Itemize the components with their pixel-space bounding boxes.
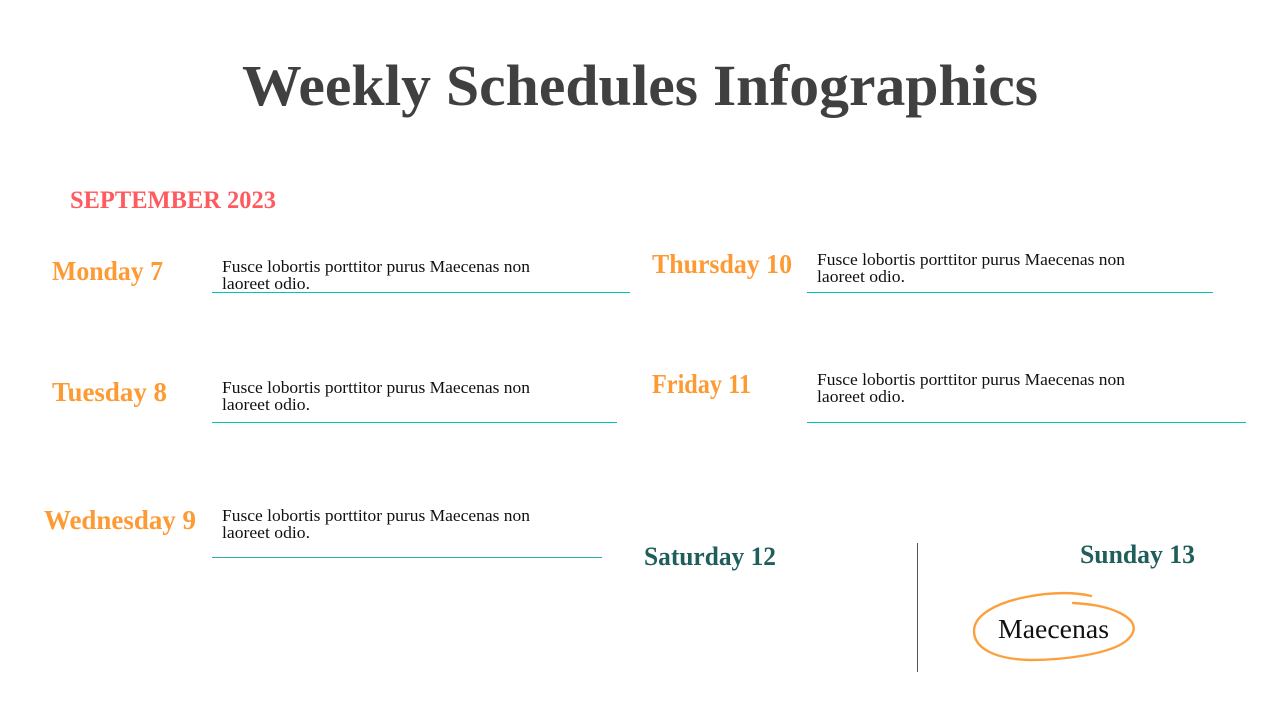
schedule row: Thursday 10: laoreet odio. — [817, 267, 905, 286]
icon: hand-drawn orange ellipse — [974, 593, 1134, 660]
schedule row: Monday 7: laoreet odio. — [222, 274, 310, 293]
schedule row: Monday 7: Monday 7 — [52, 256, 163, 286]
schedule row: Wednesday 9: Wednesday 9 — [44, 505, 196, 535]
schedule row: Tuesday 8: Tuesday 8 — [52, 377, 167, 407]
schedule row: Tuesday 8: Fusce lobortis porttitor purus Maecenas non — [222, 378, 531, 397]
weekend vertical divider — [916, 543, 918, 672]
title: Weekly Schedules Infographics — [242, 53, 1038, 118]
weekend heading: Saturday 12: Saturday 12 — [644, 542, 776, 571]
schedule row: Monday 7: Fusce lobortis porttitor purus Maecenas non — [222, 257, 531, 276]
schedule row: Friday 11 — [652, 369, 1246, 422]
callout text: Maecenas — [998, 614, 1109, 644]
schedule row: Thursday 10: Fusce lobortis porttitor purus Maecenas non — [817, 250, 1126, 269]
schedule row: Tuesday 8: laoreet odio. — [222, 395, 310, 414]
month heading: SEPTEMBER 2023 — [70, 187, 276, 214]
callout: Maecenas circled — [974, 593, 1134, 660]
schedule row: Friday 11: laoreet odio. — [817, 387, 905, 406]
weekend heading: Sunday 13: Sunday 13 — [1080, 540, 1195, 569]
schedule row: Monday 7 — [52, 256, 630, 293]
schedule row: Thursday 10 — [652, 249, 1213, 292]
schedule row: Wednesday 9: laoreet odio. — [222, 523, 310, 542]
schedule row: Tuesday 8 — [52, 377, 617, 422]
schedule row: Friday 11: Fusce lobortis porttitor purus Maecenas non — [817, 370, 1126, 389]
schedule row: Wednesday 9 — [44, 505, 602, 558]
schedule row: Wednesday 9: Fusce lobortis porttitor purus Maecenas non — [222, 506, 531, 525]
schedule row: Friday 11: Friday 11 — [652, 369, 751, 399]
schedule row: Thursday 10: Thursday 10 — [652, 249, 792, 279]
